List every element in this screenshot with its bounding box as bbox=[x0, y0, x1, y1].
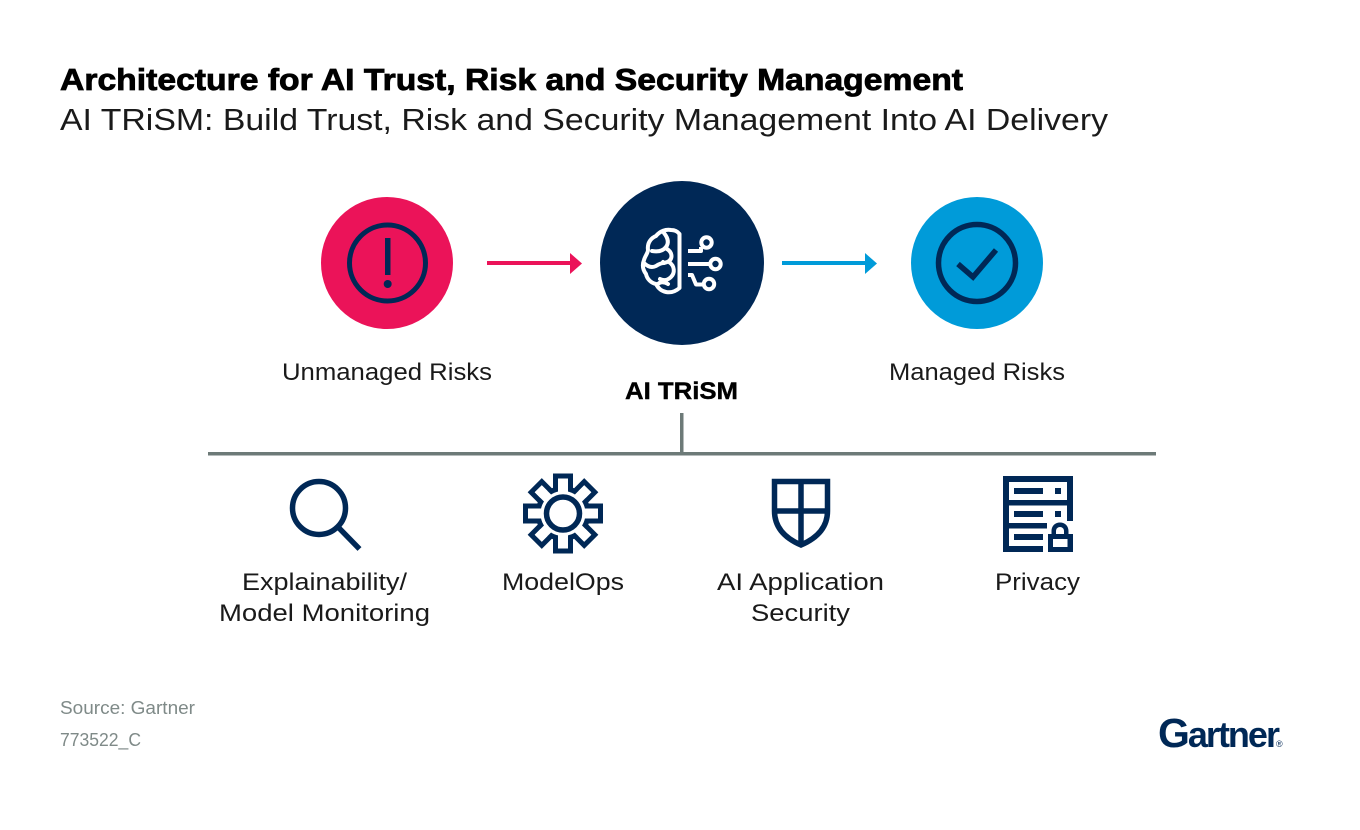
label: privacy: Privacy bbox=[995, 569, 1080, 596]
connector: AI TRiSM to capabilities bbox=[208, 413, 1156, 456]
subtitle: AI TRiSM: Build Trust, Risk and Security Management Into AI Delivery bbox=[60, 102, 1109, 137]
icon: managed risks check circle bbox=[911, 197, 1043, 329]
icon: unmanaged risks warning circle bbox=[321, 197, 453, 329]
arrow: risks to AI TRiSM bbox=[487, 253, 582, 274]
label: unmanaged risks: Unmanaged Risks bbox=[282, 359, 492, 386]
label: AI application security: AI Application bbox=[717, 569, 884, 596]
icon: server with padlock bbox=[1003, 476, 1073, 552]
Gartner logo: ® bbox=[1276, 739, 1283, 749]
title: Architecture for AI Trust, Risk and Security Management bbox=[60, 62, 963, 97]
label: AI application security bbox=[717, 569, 884, 627]
label: explainability bbox=[219, 569, 430, 627]
Gartner logo: Gartner bbox=[1158, 710, 1280, 756]
icon: gear bbox=[526, 476, 600, 551]
label: AI application security: Security bbox=[751, 600, 850, 627]
label: managed risks: Managed Risks bbox=[889, 359, 1065, 386]
icon: magnifying glass bbox=[292, 482, 360, 549]
label: ModelOps: ModelOps bbox=[502, 569, 624, 596]
label: explainability: Explainability/ bbox=[242, 569, 407, 596]
label: AI TRiSM: AI TRiSM bbox=[625, 378, 738, 405]
document id: 773522_C bbox=[60, 730, 141, 751]
source note: Source: Gartner bbox=[60, 698, 195, 718]
label: explainability: Model Monitoring bbox=[219, 600, 430, 627]
arrow: AI TRiSM to managed risks bbox=[782, 253, 877, 274]
icon: AI TRiSM brain circle bbox=[600, 181, 764, 345]
icon: shield bbox=[774, 481, 828, 545]
